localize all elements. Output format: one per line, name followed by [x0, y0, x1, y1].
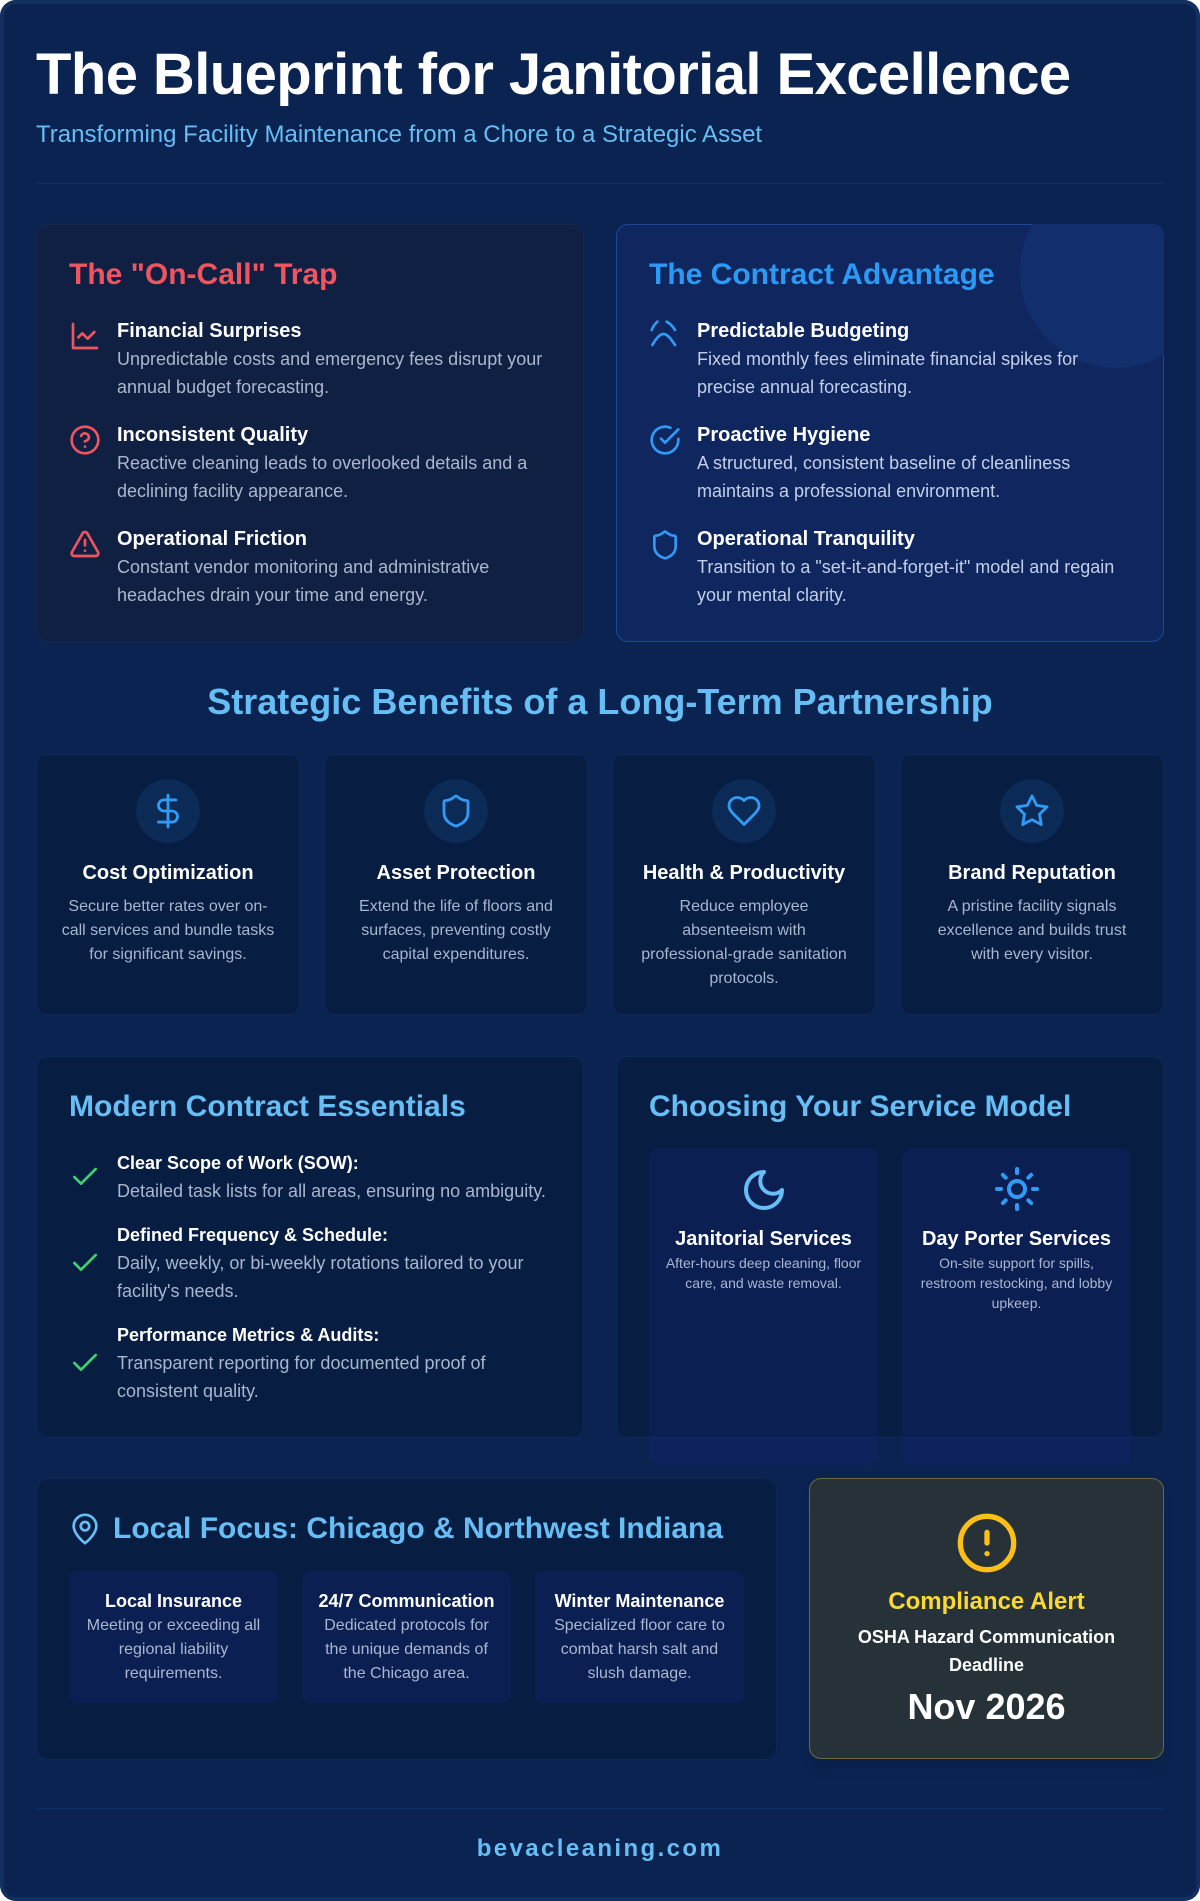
card title: Cost Optimization: [82, 862, 254, 884]
card text: excellence and builds trust: [938, 922, 1126, 939]
icon: moon: [744, 1170, 784, 1210]
card title: 24/7 Communication: [318, 1591, 495, 1611]
card text: [324, 1617, 489, 1682]
card: day porter services: [902, 1148, 1131, 1465]
text: inconsistent quality: [117, 424, 528, 501]
card text: [666, 1255, 861, 1291]
card text: [938, 898, 1126, 963]
text: performance metrics: Performance Metrics & Audits:: [117, 1325, 379, 1345]
item: proactive hygiene: [650, 424, 1070, 501]
heading: strategic benefits: Strategic Benefits of a Long-Term Partnership: [207, 681, 993, 722]
text: defined frequency: [117, 1225, 524, 1301]
text: operational tranquility: [697, 528, 1114, 605]
card text: regional liability: [119, 1641, 228, 1658]
icon: green check: [72, 1168, 98, 1186]
card text: [62, 898, 274, 963]
card text: A pristine facility signals: [948, 898, 1116, 915]
card title: Asset Protection: [377, 862, 535, 884]
footer: website: bevacleaning.com: [477, 1835, 723, 1862]
text: predictable budgeting: precise annual forecasting.: [697, 377, 912, 397]
panel: local focus: [36, 1478, 777, 1760]
text: performance metrics: [117, 1325, 486, 1401]
text: performance metrics: consistent quality.: [117, 1381, 259, 1401]
text: operational friction: headaches drain your time and energy.: [117, 585, 428, 605]
alert text: OSHA Hazard Communication: [858, 1627, 1115, 1647]
callout: compliance alert: [809, 1478, 1164, 1759]
card title: Local Insurance: [105, 1591, 242, 1611]
icon: dollar: [136, 779, 200, 843]
card text: slush damage.: [587, 1665, 692, 1682]
text: defined frequency: Defined Frequency & Schedule:: [117, 1225, 388, 1245]
panel: modern contract essentials: [36, 1056, 584, 1438]
card text: Meeting or exceeding all: [87, 1617, 260, 1634]
card text: with every visitor.: [971, 946, 1093, 963]
heading: contract advantage: The Contract Advantage: [649, 258, 995, 291]
heading: service model: Choosing Your Service Model: [649, 1090, 1071, 1123]
icon: budgeting arcs: [650, 320, 676, 346]
text: defined frequency: facility's needs.: [117, 1281, 238, 1301]
card text: [87, 1617, 260, 1682]
text: financial surprises: Unpredictable costs and emergency fees disrupt your: [117, 349, 542, 369]
card title: Janitorial Services: [675, 1228, 852, 1250]
card text: [921, 1255, 1112, 1311]
card text: [359, 898, 553, 963]
text: performance metrics: Transparent reporting for documented proof of: [117, 1353, 486, 1373]
essential: clear scope of work: [72, 1153, 546, 1201]
text: inconsistent quality: Inconsistent Quality: [117, 424, 308, 446]
text: defined frequency: Daily, weekly, or bi-weekly rotations tailored to your: [117, 1253, 524, 1273]
text: predictable budgeting: Fixed monthly fees eliminate financial spikes for: [697, 349, 1078, 369]
card text: the Chicago area.: [343, 1665, 470, 1682]
card text: Specialized floor care to: [554, 1617, 725, 1634]
card text: Extend the life of floors and: [359, 898, 553, 915]
alert title: Compliance Alert: [888, 1588, 1085, 1615]
card: brand reputation: [900, 754, 1164, 1015]
card title: Winter Maintenance: [555, 1591, 724, 1611]
card text: On-site support for spills,: [939, 1255, 1094, 1271]
card text: [554, 1617, 725, 1682]
card title: Day Porter Services: [922, 1228, 1111, 1250]
text: clear scope of work: Clear Scope of Work (SOW):: [117, 1153, 359, 1173]
card text: After-hours deep cleaning, floor: [666, 1255, 861, 1271]
card text: capital expenditures.: [383, 946, 529, 963]
text: proactive hygiene: A structured, consistent baseline of cleanliness: [697, 453, 1070, 473]
card text: combat harsh salt and: [561, 1641, 718, 1658]
text: financial surprises: annual budget forecasting.: [117, 377, 329, 397]
card text: professional-grade sanitation: [641, 946, 847, 963]
panel: choosing your service model: [616, 1056, 1164, 1438]
card: winter maintenance: [535, 1571, 744, 1703]
text: operational friction: Operational Friction: [117, 528, 307, 550]
card text: requirements.: [125, 1665, 222, 1682]
icon: shield: [653, 530, 677, 560]
item: operational tranquility: [653, 528, 1114, 605]
text: financial surprises: Financial Surprises: [117, 320, 302, 342]
text: inconsistent quality: declining facility appearance.: [117, 481, 348, 501]
card: asset protection: [324, 754, 588, 1015]
text: proactive hygiene: [697, 424, 1070, 501]
text: clear scope of work: Detailed task lists for all areas, ensuring no ambiguity.: [117, 1181, 546, 1201]
card: local insurance: [69, 1571, 278, 1703]
heading: on-call trap: The "On-Call" Trap: [69, 258, 337, 291]
card text: restroom restocking, and lobby: [921, 1275, 1112, 1291]
card text: upkeep.: [992, 1295, 1041, 1311]
title: The Blueprint for Janitorial Excellence: [36, 42, 1071, 107]
alert date: Nov 2026: [907, 1686, 1066, 1727]
card text: care, and waste removal.: [685, 1275, 842, 1291]
icon: heart: [712, 779, 776, 843]
card text: [641, 898, 847, 987]
card text: call services and bundle tasks: [62, 922, 274, 939]
text: proactive hygiene: Proactive Hygiene: [697, 424, 870, 446]
item: predictable budgeting: [650, 320, 1078, 397]
icon: green check: [72, 1254, 98, 1272]
alert text: [810, 1623, 1163, 1679]
panel: the on-call trap: [36, 224, 584, 642]
icon: shield: [424, 779, 488, 843]
icon: green check: [72, 1354, 98, 1372]
text: operational tranquility: Operational Tranquility: [697, 528, 915, 550]
text: predictable budgeting: [697, 320, 1078, 397]
text: operational friction: [117, 528, 489, 605]
card text: Secure better rates over on-: [68, 898, 268, 915]
icon: star: [1000, 779, 1064, 843]
icon: alert circle: [958, 1514, 1016, 1572]
text: predictable budgeting: Predictable Budgeting: [697, 320, 909, 342]
card title: Health & Productivity: [643, 862, 845, 884]
card: communication: [302, 1571, 511, 1703]
card: cost optimization: [36, 754, 300, 1015]
essential: defined frequency: [72, 1225, 524, 1301]
card text: protocols.: [709, 970, 779, 987]
subtitle: Transforming Facility Maintenance from a Chore to a Strategic Asset: [36, 121, 762, 148]
essential: performance metrics: [72, 1325, 486, 1401]
icon: sun: [995, 1167, 1039, 1211]
icon: line chart: [72, 322, 98, 350]
panel: the contract advantage: [616, 224, 1164, 642]
heading: local focus: Local Focus: Chicago & Northwest Indiana: [113, 1512, 723, 1545]
card text: Dedicated protocols for: [324, 1617, 489, 1634]
text: operational tranquility: your mental clarity.: [697, 585, 847, 605]
heading: contract essentials: Modern Contract Essentials: [69, 1090, 466, 1123]
text: proactive hygiene: maintains a professional environment.: [697, 481, 1000, 501]
card text: absenteeism with: [682, 922, 806, 939]
item: operational friction: [70, 528, 489, 605]
text: clear scope of work: [117, 1153, 546, 1201]
card text: the unique demands of: [325, 1641, 488, 1658]
icon: question circle: [70, 425, 100, 455]
text: financial surprises: [117, 320, 542, 397]
text: operational tranquility: Transition to a "set-it-and-forget-it" model and regain: [697, 557, 1114, 577]
item: inconsistent quality: [70, 424, 528, 501]
card: janitorial services: [649, 1148, 878, 1465]
card text: surfaces, preventing costly: [361, 922, 551, 939]
text: inconsistent quality: Reactive cleaning leads to overlooked details and a: [117, 453, 527, 473]
card text: for significant savings.: [89, 946, 247, 963]
card text: Reduce employee: [680, 898, 808, 915]
icon: warning triangle: [70, 530, 100, 558]
text: operational friction: Constant vendor monitoring and administrative: [117, 557, 489, 577]
alert text: Deadline: [949, 1655, 1024, 1675]
card title: Brand Reputation: [948, 862, 1116, 884]
icon: map pin: [72, 1514, 98, 1544]
card: health and productivity: [612, 754, 876, 1015]
icon: check circle: [650, 425, 680, 455]
item: financial surprises: [72, 320, 542, 397]
